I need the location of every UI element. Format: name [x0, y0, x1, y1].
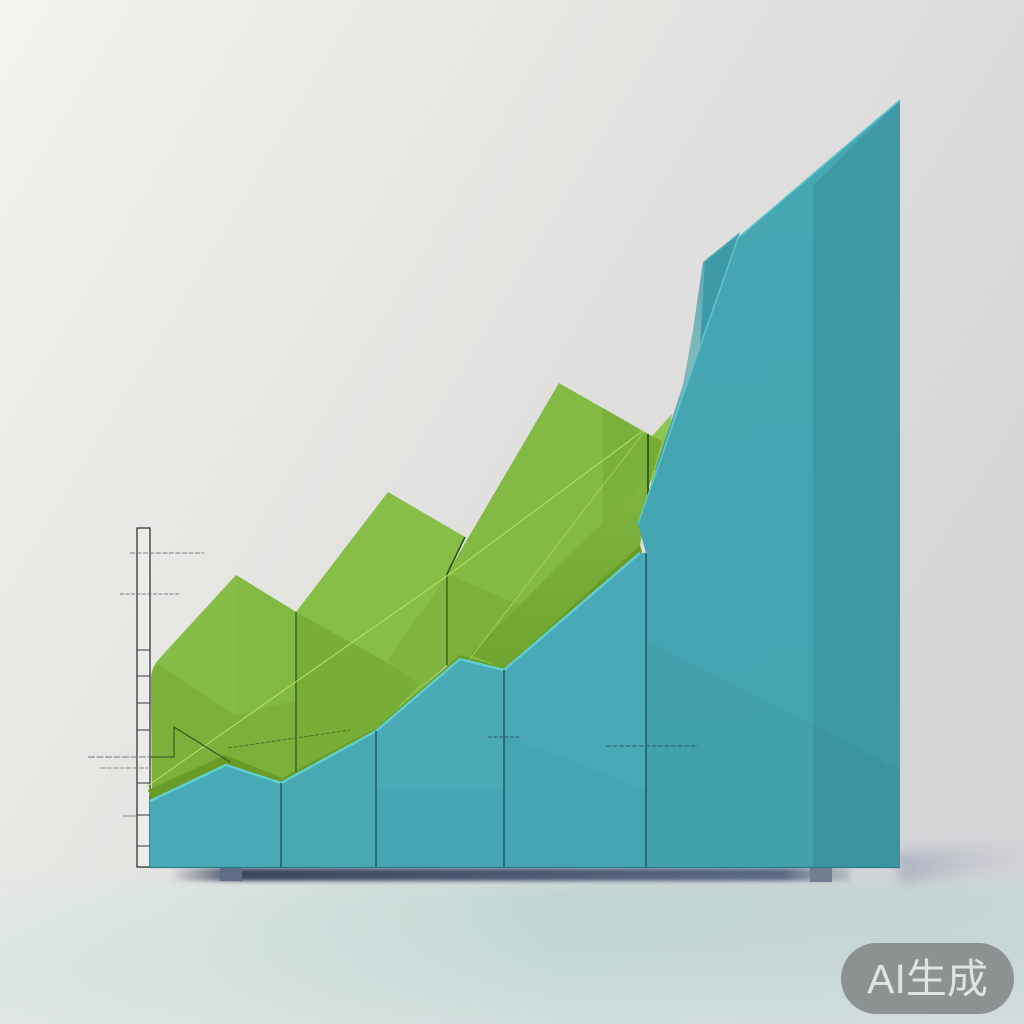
teal bars — [150, 100, 900, 868]
scale ruler — [88, 528, 204, 867]
teal bar 2 — [281, 731, 376, 868]
tall teal back fold — [655, 232, 740, 470]
green front edge — [148, 545, 642, 802]
dashed line — [228, 730, 350, 748]
green back mountains — [146, 383, 672, 802]
thin light trend line — [146, 430, 644, 787]
green peak 3 side sliver — [650, 414, 672, 540]
dark separators — [295, 612, 297, 772]
bright top edge — [150, 553, 640, 801]
teal bar 3 — [376, 659, 504, 868]
ruler tick annotations — [88, 553, 204, 816]
dark zigzag line — [150, 727, 230, 762]
teal bar 4 — [504, 553, 646, 868]
green peak 2 — [296, 492, 465, 772]
green peak 1 — [151, 575, 296, 800]
floor — [0, 884, 1024, 1024]
green peak 3 — [447, 383, 648, 690]
base plate shadow — [170, 868, 850, 882]
badge: AI generated — [841, 943, 1014, 1014]
badge: AI generated: AI生成 — [867, 956, 988, 1002]
right side shadow on floor — [896, 846, 1024, 884]
bar dividers — [281, 553, 646, 868]
dashed marks on teal — [488, 736, 520, 738]
teal bar 1 — [150, 765, 281, 868]
teal bar 5 tall — [638, 100, 900, 868]
